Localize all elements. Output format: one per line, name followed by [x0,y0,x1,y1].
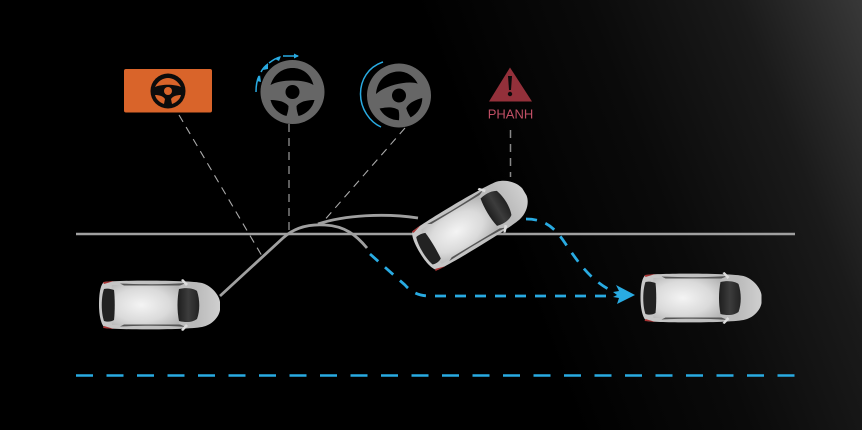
car: start position [99,279,220,331]
icon: orange panel steering wheel [150,74,186,108]
arrow head [613,285,635,304]
label: PHANH: PHANH [488,106,533,122]
warning panel: orange [124,69,212,112]
leader lines [179,115,510,256]
car: emergency position [407,169,537,276]
icon: steering wheel turned with arc [360,57,438,134]
vehicle path: blue dashed [370,219,612,296]
icon: steering wheel with stepped arrows [256,54,324,124]
road centre line [76,233,795,235]
icon: warning triangle [489,68,532,102]
vehicle path: grey [220,215,418,296]
lane dashed line [76,374,795,377]
car: final position [640,272,762,324]
